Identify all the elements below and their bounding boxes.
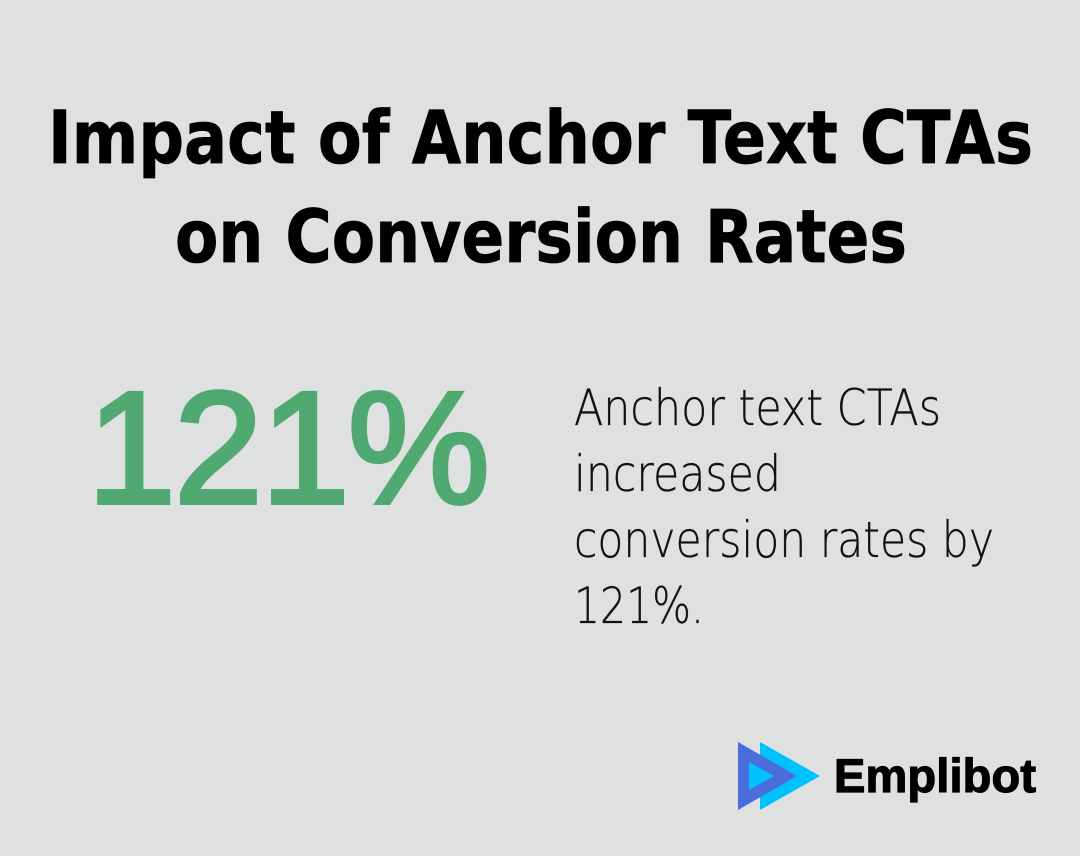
description text: 121%. [574,577,704,635]
description text: conversion rates by [574,511,994,569]
description text: increased [574,445,781,503]
logo: Emplibot [738,742,1036,810]
description text: Anchor text CTAs [574,379,941,437]
title: on Conversion Rates [175,195,907,280]
description text [574,379,994,635]
logo wordmark: Emplibot [834,749,1036,802]
big statistic: 121%: 121% [87,358,490,537]
icon: play triangles [738,742,820,810]
title [48,96,1033,280]
